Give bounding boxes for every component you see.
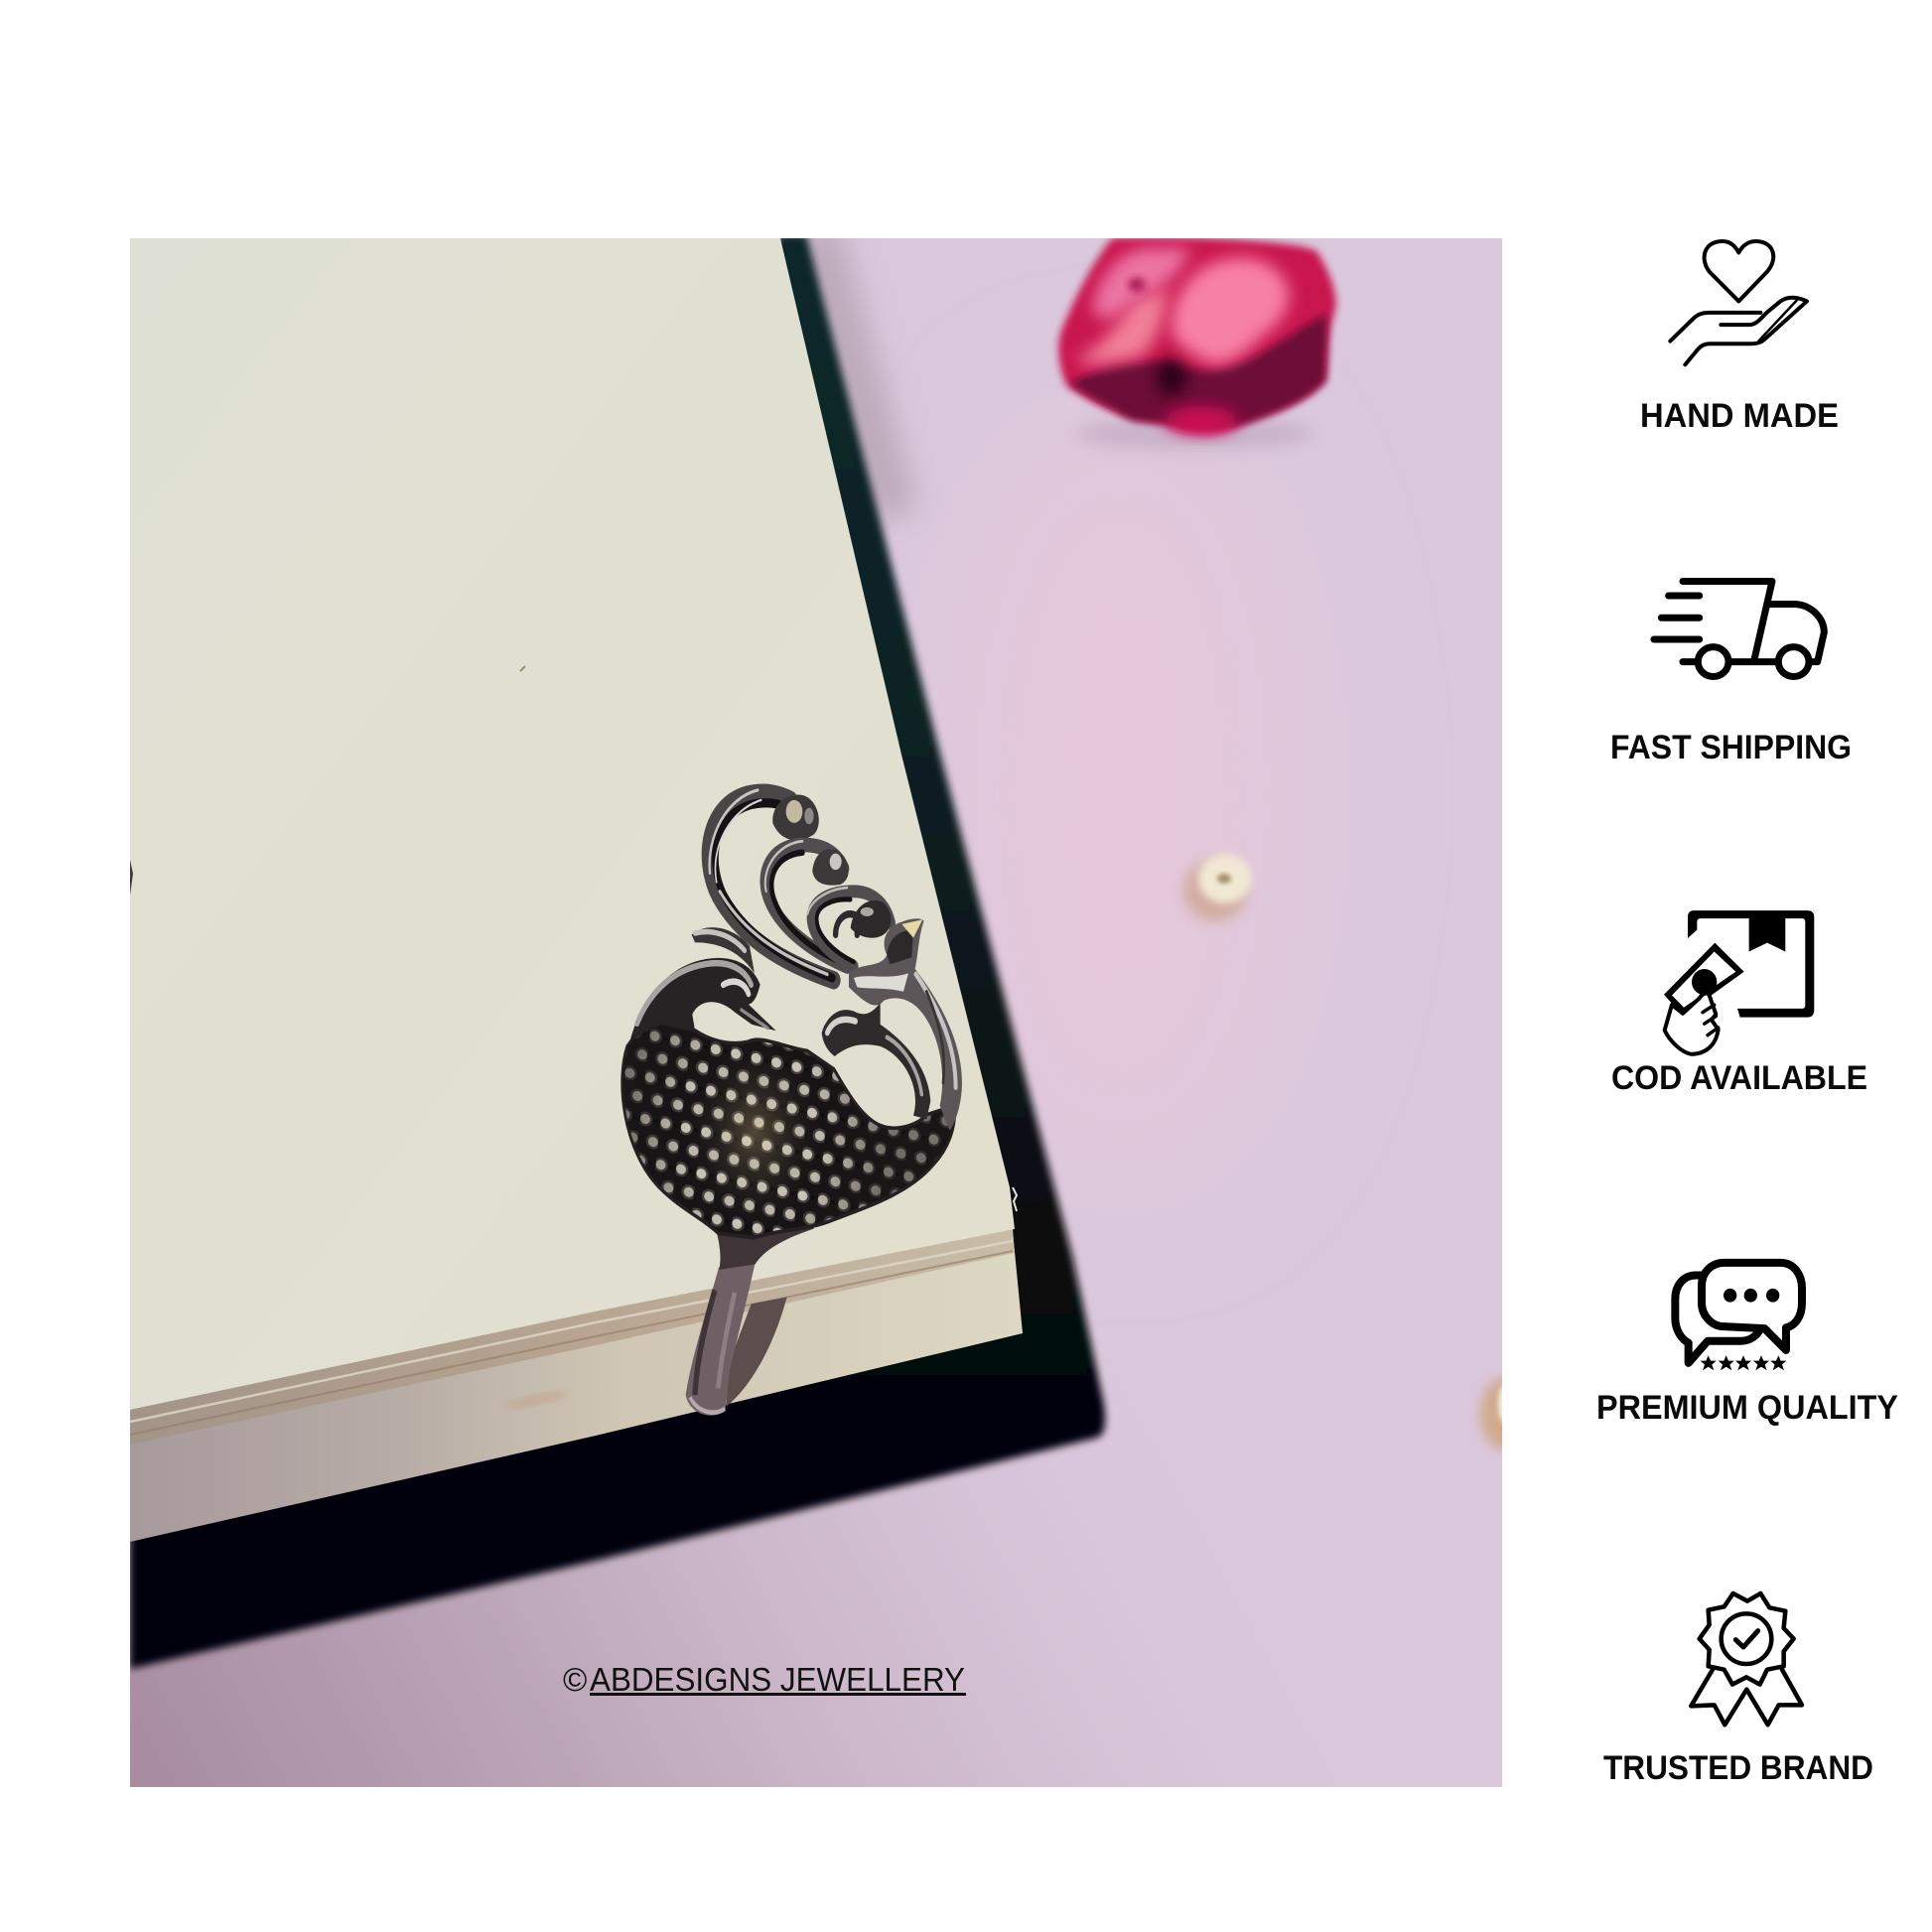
- label: COD AVAILABLE: [1611, 1059, 1867, 1097]
- book top page: [130, 238, 1015, 1410]
- book page stack edge: [130, 1229, 1023, 1542]
- crest: [692, 927, 755, 973]
- label: PREMIUM QUALITY: [1596, 1389, 1898, 1427]
- feature: cod available: [1611, 910, 1867, 1097]
- rose petal: [1058, 237, 1336, 450]
- label: HAND MADE: [1640, 397, 1839, 435]
- peacock nose pin: [622, 790, 962, 1416]
- book cover: [130, 234, 1105, 1669]
- feather three: [807, 888, 891, 967]
- label: TRUSTED BRAND: [1603, 1749, 1873, 1787]
- icon: award rosette: [1691, 1593, 1802, 1725]
- icon: chat bubbles with stars: [1675, 1263, 1802, 1370]
- icon: heart in hand: [1670, 241, 1807, 364]
- hook: [686, 1263, 787, 1416]
- inner neck loop: [822, 1003, 930, 1119]
- left neck and head: [630, 958, 776, 1039]
- pearl bead: [1183, 854, 1252, 921]
- watermark: [564, 1668, 966, 1696]
- feather one: [708, 790, 834, 980]
- pink background surface: [130, 228, 1502, 1787]
- infographic canvas: [130, 238, 1898, 1787]
- right neck and crown: [849, 918, 962, 1131]
- watermark: ABDESIGNS JEWELLERY: [590, 1661, 965, 1698]
- label: FAST SHIPPING: [1610, 729, 1852, 766]
- feature: premium quality: [1596, 1263, 1898, 1427]
- small marks on page: [130, 666, 1017, 1211]
- feature: fast shipping: [1610, 581, 1852, 766]
- watermark: ©: [563, 1661, 587, 1698]
- second pearl at edge: [1473, 1372, 1502, 1455]
- feather two: [765, 841, 849, 967]
- icon: cash on delivery box: [1664, 910, 1814, 1054]
- body: [622, 1024, 955, 1270]
- feature: hand made: [1640, 241, 1839, 435]
- product photo panel: [130, 228, 1526, 1787]
- feature: trusted brand: [1603, 1593, 1873, 1787]
- icon: delivery truck: [1654, 581, 1824, 677]
